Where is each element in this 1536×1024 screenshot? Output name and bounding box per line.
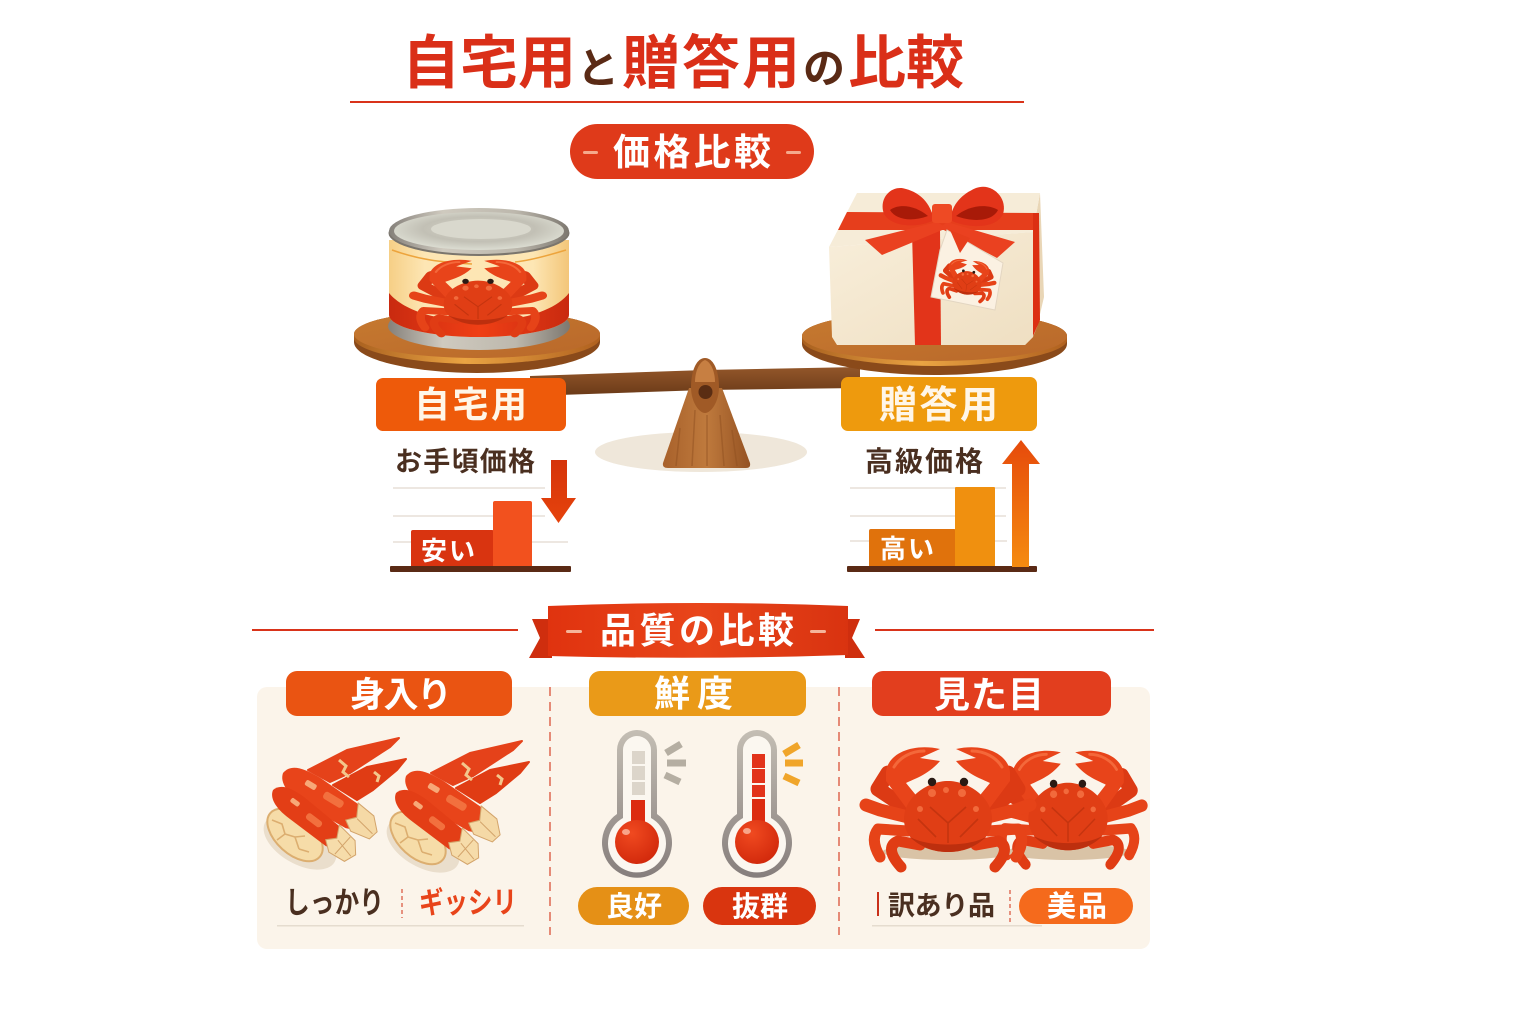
down arrow <box>541 460 576 523</box>
header: freshness: 鮮度 <box>654 673 733 714</box>
tall bar <box>955 487 995 568</box>
high bar <box>869 529 956 568</box>
text: seconds: 訳あり品 <box>888 891 995 921</box>
header: freshness <box>589 671 806 716</box>
crab legs left <box>254 738 406 881</box>
price comparison heading pill <box>570 124 814 179</box>
premium price chart <box>847 440 1040 572</box>
left plate <box>354 310 600 373</box>
title: と <box>577 45 619 92</box>
right plate <box>802 311 1067 375</box>
price comparison heading pill: 価格比較 <box>613 132 771 173</box>
quality panel background <box>257 687 1150 949</box>
text: firm: しっかり <box>285 887 384 920</box>
text: packed: ギッシリ <box>419 887 517 920</box>
pill: good <box>578 887 689 925</box>
title: 比較 <box>848 31 964 96</box>
bow knot <box>932 204 952 223</box>
bow left loop <box>883 188 934 225</box>
red band <box>389 293 569 337</box>
title: 自宅用 <box>402 31 576 96</box>
crab on tag <box>938 256 997 303</box>
tall bar <box>493 501 532 568</box>
box front <box>829 232 1033 345</box>
column: freshness <box>578 671 816 925</box>
affordable price text: お手頃価格 <box>395 447 535 477</box>
title <box>402 31 964 96</box>
header: appearance <box>872 671 1111 716</box>
ribbon banner: 品質の比較 <box>600 610 794 651</box>
quality section heading <box>252 603 1154 658</box>
gift tag <box>931 230 1003 310</box>
column: meat fill <box>254 671 529 926</box>
crab left <box>866 747 1030 867</box>
crab on can <box>414 260 542 334</box>
low bar <box>411 530 494 568</box>
up arrow <box>1002 440 1040 567</box>
seesaw scale <box>530 358 860 472</box>
header: meat fill <box>286 671 512 716</box>
label: gift use: 贈答用 <box>879 385 998 427</box>
ribbon side strip <box>1033 213 1040 336</box>
pill: good: 良好 <box>606 891 662 922</box>
pill: excellent: 抜群 <box>732 891 788 922</box>
can body <box>389 240 569 337</box>
ribbon banner <box>529 603 865 658</box>
fulcrum <box>663 358 750 468</box>
canned crab <box>388 208 570 350</box>
thermometer good <box>602 730 686 878</box>
column: appearance <box>866 671 1142 926</box>
scale shadow <box>595 432 807 472</box>
pill: beautiful <box>1019 888 1133 924</box>
header: appearance: 見た目 <box>934 674 1044 715</box>
baseline <box>390 566 571 572</box>
premium price text: 高級価格 <box>865 446 983 477</box>
bow right loop <box>950 187 1004 226</box>
pill: excellent <box>703 887 816 925</box>
crab right <box>994 751 1142 864</box>
label: gift use <box>841 377 1037 431</box>
crab legs right <box>377 741 529 884</box>
scale beam <box>530 367 860 396</box>
thermometer excellent <box>722 730 803 878</box>
gift box <box>829 187 1044 345</box>
affordable price chart <box>390 447 576 572</box>
box right side <box>1025 193 1044 345</box>
baseline <box>847 566 1037 572</box>
can bottom rim <box>388 302 570 350</box>
low bar: 安い <box>421 536 475 566</box>
header: meat fill: 身入り <box>350 676 452 715</box>
ribbon vertical <box>912 228 941 345</box>
high bar: 高い <box>880 534 934 564</box>
box top <box>829 193 1040 247</box>
pill: beautiful: 美品 <box>1047 890 1107 923</box>
title: の <box>803 45 845 92</box>
title: 贈答用 <box>622 31 800 96</box>
ribbon tails <box>865 222 947 255</box>
can lid <box>388 208 570 256</box>
label: home use <box>376 378 566 431</box>
label: home use: 自宅用 <box>414 384 527 425</box>
ribbon horizontal <box>838 212 1037 230</box>
